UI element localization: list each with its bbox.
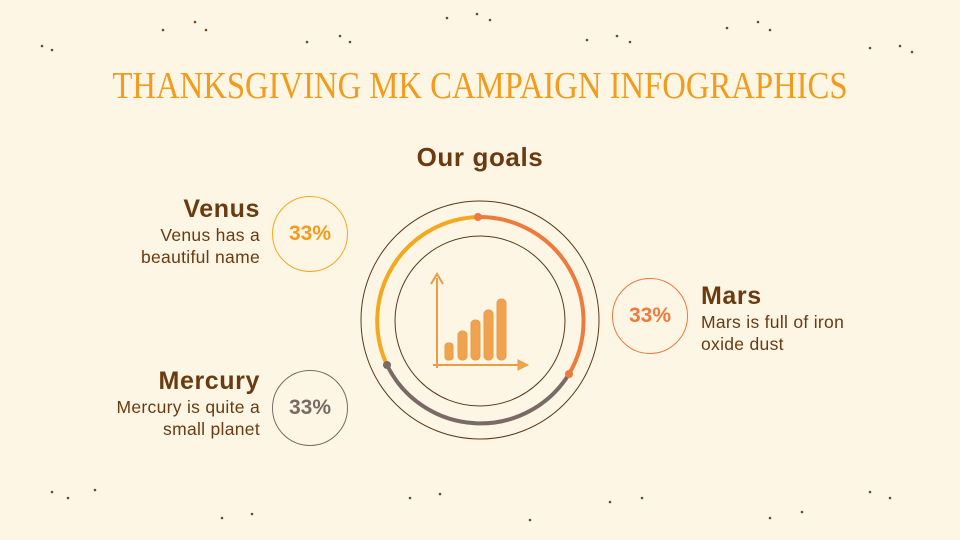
icon: bar chart xyxy=(431,274,528,370)
Venus percent xyxy=(272,196,348,272)
subtitle: Our goals xyxy=(417,142,543,172)
Mercury block: small planet xyxy=(163,419,260,439)
Mars block: Mars xyxy=(701,282,762,310)
Venus block xyxy=(141,195,260,267)
Mars percent: 33% xyxy=(629,304,671,327)
Venus block: Venus has a xyxy=(160,225,260,245)
Venus block: Venus xyxy=(183,195,260,223)
Mercury block: Mercury xyxy=(159,367,260,395)
Mars block xyxy=(701,282,844,354)
Mercury percent xyxy=(272,370,348,446)
Mars block: Mars is full of iron xyxy=(701,312,844,332)
Mercury percent: 33% xyxy=(289,396,331,419)
Mercury block xyxy=(116,367,260,439)
Mars block: oxide dust xyxy=(701,334,784,354)
title: THANKSGIVING MK CAMPAIGN INFOGRAPHICS xyxy=(112,65,848,107)
Mars percent xyxy=(612,278,688,354)
Venus percent: 33% xyxy=(289,222,331,245)
Mercury block: Mercury is quite a xyxy=(116,397,260,417)
Venus block: beautiful name xyxy=(141,247,260,267)
